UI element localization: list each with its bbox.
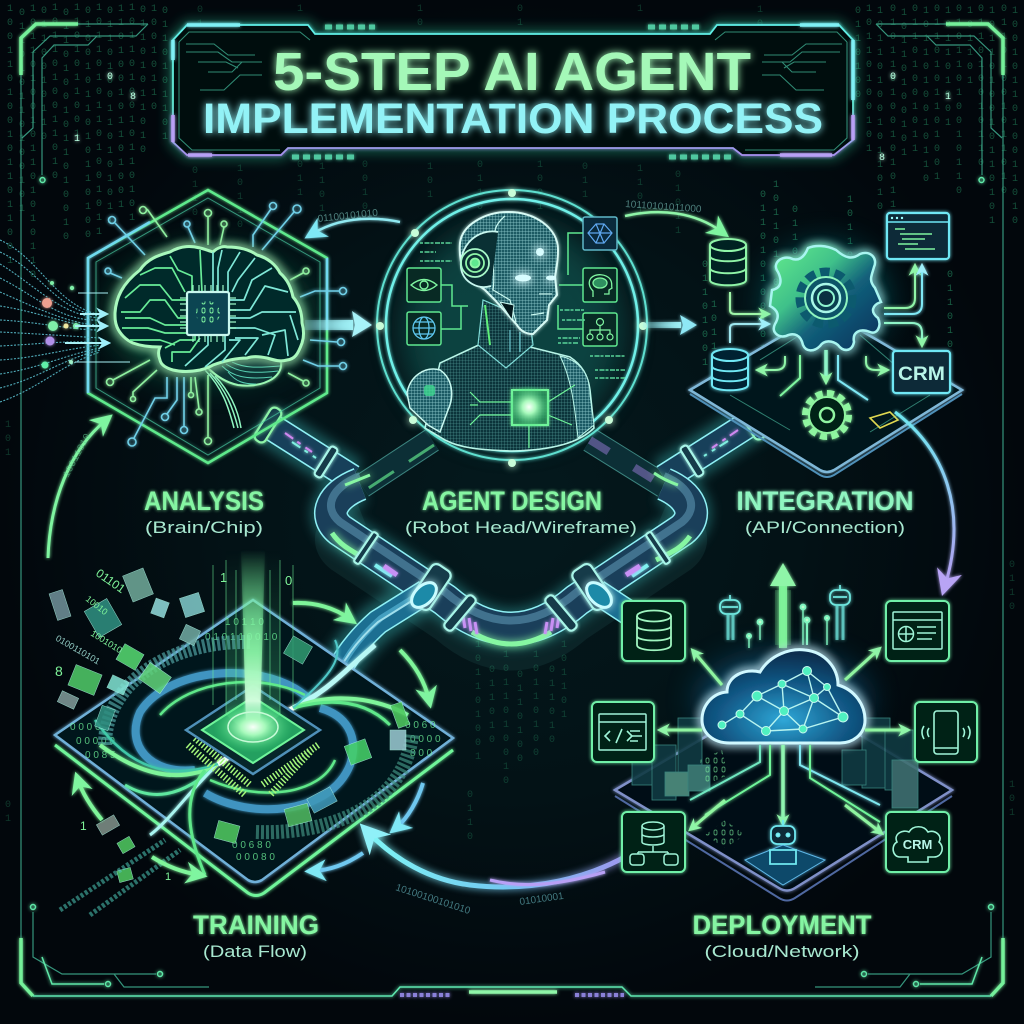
binary rain background: 10110100101 bbox=[864, 4, 874, 158]
platform bits: 0 0 0 8 0 bbox=[236, 852, 275, 863]
robot right shoulder bbox=[560, 356, 594, 438]
bright rain characters: 8 bbox=[876, 153, 888, 167]
icon: database lower bbox=[712, 349, 748, 390]
beam core bbox=[213, 701, 293, 753]
deployment arrows bbox=[662, 650, 906, 832]
binary rain background: 0110010110 bbox=[38, 6, 50, 146]
flying bits: 1 bbox=[165, 871, 171, 883]
panel: agent design bbox=[376, 189, 697, 467]
label: analysis: (Brain/Chip) bbox=[145, 518, 263, 537]
binary rain background: 01101001011010 bbox=[998, 4, 1010, 200]
brain folds bbox=[121, 250, 298, 367]
binary rain background: 101101001 bbox=[770, 180, 782, 306]
binary rain background: 1001101001011011001 bbox=[4, 4, 16, 270]
binary rain background: 01101001011010010 bbox=[60, 8, 72, 246]
bright rain characters: 1 bbox=[942, 92, 954, 106]
binary rain background: 01011 bbox=[672, 170, 684, 240]
flying bits: 1 bbox=[80, 819, 87, 833]
chip bbox=[186, 686, 320, 795]
binary rain background: 1001 bbox=[534, 160, 546, 216]
outer data bands bbox=[105, 642, 412, 832]
soft glows under steps bbox=[108, 220, 886, 790]
pipe reflection bbox=[331, 510, 691, 654]
binary rain background: 10110101101001011 bbox=[94, 3, 104, 241]
binary rain background: 0110 bbox=[790, 205, 800, 261]
icon: hierarchy bbox=[583, 313, 617, 346]
flying bits: 1 bbox=[220, 570, 227, 585]
binary rain background: 1101011001 bbox=[72, 3, 82, 143]
wireframe robot bbox=[407, 212, 594, 451]
brain bbox=[115, 247, 304, 428]
flying bits: 0100110101 bbox=[54, 633, 102, 666]
vertical data pins bbox=[747, 605, 829, 648]
binary arc labels: 10110101011000 bbox=[625, 199, 702, 215]
binary rain background: 0110101101001 bbox=[932, 4, 942, 186]
icon: CRM box: CRM bbox=[898, 364, 945, 385]
binary rain background: 1011010010110101 bbox=[986, 6, 998, 230]
pipe nozzles bbox=[407, 578, 616, 612]
output arrow to agent design bbox=[305, 311, 372, 337]
bottom robot bbox=[745, 820, 825, 885]
binary rain background: 01101001011 bbox=[910, 4, 920, 158]
pipe flanges bbox=[253, 403, 767, 632]
banner halo bbox=[173, 25, 853, 155]
binary rain background: 01 bbox=[514, 4, 526, 32]
label: agent design: (Robot Head/Wireframe) bbox=[405, 518, 637, 537]
robot neck bbox=[478, 300, 533, 368]
pseudo text lines bbox=[420, 243, 625, 378]
binary rain background: 0110101001011 bbox=[758, 190, 768, 372]
panel: deployment bbox=[592, 563, 977, 900]
icon: CRM cloud tile bbox=[886, 812, 949, 872]
data patches on platform bbox=[700, 750, 745, 848]
binary rain background: 0110 bbox=[474, 160, 486, 216]
cloud bbox=[702, 650, 865, 743]
binary rain background: 1011010010110 bbox=[920, 6, 932, 188]
binary rain background: 1 bbox=[294, 4, 306, 18]
binary rain background: 01101001 bbox=[700, 260, 710, 372]
icon: mobile tile bbox=[915, 702, 977, 762]
binary rain background: 011010110100101 bbox=[16, 8, 28, 218]
label: training: TRAINING bbox=[193, 910, 319, 940]
cloud to platform traces bbox=[690, 745, 880, 822]
icon: globe bbox=[407, 312, 441, 345]
binary rain background: 01101011010 bbox=[138, 5, 148, 159]
robot eyes bbox=[515, 248, 556, 282]
binary rain background: 1011010011010 bbox=[50, 3, 60, 185]
city buildings bbox=[632, 718, 918, 808]
training pipe light bbox=[296, 592, 426, 708]
binary arc labels bbox=[317, 199, 702, 225]
binary rain background: 101101001 bbox=[472, 640, 484, 766]
design connector lines bbox=[441, 233, 583, 329]
incoming data dots bbox=[42, 281, 79, 368]
arc arrow: design to integration bbox=[625, 212, 722, 232]
icon: CRM cloud tile: CRM bbox=[903, 837, 932, 852]
binary rain background: 10 bbox=[414, 4, 426, 32]
bottom frame bar bbox=[33, 987, 991, 996]
small robots bbox=[720, 585, 850, 640]
up arrow bbox=[770, 563, 796, 648]
binary arc labels: 01100101010 bbox=[317, 208, 379, 225]
icon: eye bbox=[407, 268, 441, 302]
platform bits: 0 0 8 5 bbox=[85, 750, 116, 761]
ring nodes bbox=[376, 189, 647, 467]
label: training bbox=[193, 910, 319, 961]
binary rain background: 011 bbox=[580, 162, 590, 204]
binary rain background: 1011010010 bbox=[500, 650, 512, 790]
arc arrow: integration to deployment bbox=[895, 412, 954, 586]
binary rain background: 0101101001010110 bbox=[888, 4, 898, 228]
binary arc labels: 01010001 bbox=[519, 891, 565, 908]
robot ear bbox=[461, 231, 498, 287]
icon: head bbox=[583, 268, 617, 302]
binary rain background: 01 bbox=[2, 800, 14, 828]
arc arrow: design to analysis bbox=[312, 219, 400, 234]
bright rain characters: 1 bbox=[72, 134, 82, 148]
light beam bbox=[213, 550, 293, 738]
binary rain background: 1101 bbox=[634, 164, 646, 220]
flying bits: 10010 bbox=[84, 594, 110, 617]
platform bits: 0 1 0 1 1 0 0 1 0 bbox=[205, 632, 278, 643]
output arrow to integration bbox=[643, 315, 697, 335]
binary rain background: 01 bbox=[194, 5, 206, 33]
upper pipe data lights bbox=[285, 430, 738, 458]
binary arc labels: 10100100101010 bbox=[394, 882, 472, 917]
binary rain background: 10010110 bbox=[148, 4, 160, 116]
icon: data tree tile bbox=[622, 812, 685, 872]
platform bits: 0 0 0 0 0 bbox=[76, 736, 115, 747]
binary rain background: 10110100 bbox=[530, 650, 542, 762]
icon: CRM box bbox=[893, 351, 950, 393]
panel: training bbox=[49, 550, 453, 915]
label: deployment: DEPLOYMENT bbox=[692, 910, 872, 940]
incoming data stream bbox=[0, 240, 100, 402]
binary rain background: 0110100 bbox=[852, 6, 864, 104]
binary rain background: 101101 bbox=[558, 640, 570, 724]
label: agent design: AGENT DESIGN bbox=[422, 486, 602, 516]
training platform bbox=[55, 600, 453, 882]
brain outline bbox=[115, 247, 304, 372]
binary rain background: 101101001011010 bbox=[874, 6, 886, 216]
binary rain background: 011 bbox=[294, 160, 306, 202]
binary rain background: 101 bbox=[1006, 780, 1018, 822]
flying bits: 01101 bbox=[93, 566, 128, 596]
frame terminal circles bbox=[30, 178, 994, 986]
robot neck wires bbox=[485, 305, 520, 352]
circuit traces around brain bbox=[105, 202, 346, 446]
platform bits: 0 0 6 0 bbox=[405, 720, 436, 731]
binary rain background: 0110100 bbox=[514, 670, 526, 768]
platform bits: 0 0 0 0 bbox=[70, 722, 101, 733]
robot torso bbox=[425, 343, 594, 451]
puzzle gear bbox=[770, 246, 881, 350]
title banner bbox=[173, 25, 853, 157]
robot left shoulder bbox=[407, 369, 452, 432]
purple strand bbox=[490, 872, 605, 885]
label: analysis bbox=[144, 486, 264, 537]
pipe purple light strips bbox=[384, 566, 640, 634]
cloud nodes bbox=[718, 666, 848, 736]
flying bits: 0 bbox=[285, 573, 292, 588]
binary rain background: 101 bbox=[2, 420, 14, 462]
pipe shells bbox=[262, 417, 760, 478]
robot head bbox=[460, 212, 558, 334]
binary rain background: 011010010110 bbox=[976, 4, 986, 172]
binary rain background: 011010 bbox=[546, 665, 558, 749]
panel: integration bbox=[690, 213, 962, 477]
platform bits: 8 0 0 bbox=[410, 748, 433, 759]
binary rain background: 101101 bbox=[964, 6, 976, 90]
lower left data ribbon bbox=[60, 840, 180, 915]
label: integration bbox=[736, 486, 914, 537]
incoming arrows bbox=[65, 293, 130, 362]
arc arrow: training to analysis bbox=[48, 420, 106, 558]
analysis hexagon bbox=[88, 190, 327, 463]
pipe cyan light strips bbox=[375, 565, 648, 576]
brain chip bbox=[180, 285, 236, 342]
binary rain background: 0110 bbox=[190, 166, 200, 222]
title line 1: 5-STEP AI AGENT bbox=[273, 42, 751, 102]
icon: neural net bbox=[583, 217, 617, 250]
yellow connector bbox=[870, 412, 898, 428]
label: integration: INTEGRATION bbox=[736, 486, 914, 516]
label: training: (Data Flow) bbox=[203, 942, 307, 961]
icon: database tile bbox=[622, 601, 685, 661]
vortex blue arcs bbox=[136, 673, 353, 809]
banner frame bbox=[173, 25, 853, 155]
icon: web tile bbox=[886, 601, 949, 661]
platform thickness bbox=[690, 394, 962, 477]
binary rain background: 110100101101001 bbox=[116, 4, 126, 214]
flying bits bbox=[54, 566, 292, 883]
binary arc label: 10011010 bbox=[62, 432, 94, 480]
label: analysis: ANALYSIS bbox=[144, 486, 264, 516]
binary rain background: 10 bbox=[754, 5, 766, 33]
pipe glow bbox=[262, 417, 760, 708]
label: agent design bbox=[405, 486, 637, 537]
integration platform bbox=[690, 310, 962, 472]
label: deployment: (Cloud/Network) bbox=[704, 942, 860, 961]
robot shoulder joint bbox=[424, 385, 435, 396]
connecting pipes bbox=[262, 417, 760, 708]
icon: database top bbox=[710, 239, 746, 285]
arc arrow: deployment to training bbox=[368, 832, 640, 917]
platform thickness bbox=[55, 745, 453, 896]
deployment platform bbox=[615, 690, 952, 890]
binary rain background: 10110100101101010110 bbox=[28, 4, 38, 284]
data fragments bbox=[49, 568, 410, 883]
binary arc labels bbox=[394, 882, 565, 917]
robot chest core bbox=[470, 385, 575, 448]
binary rain background: 101101 bbox=[844, 195, 856, 279]
binary rain background: 1011010010110101 bbox=[126, 3, 138, 227]
binary rain background: 1101 bbox=[316, 162, 328, 218]
flying bits: 8 bbox=[55, 663, 63, 679]
pipe green light strips bbox=[332, 473, 690, 644]
platform bits: 0 0 6 8 0 bbox=[232, 840, 271, 851]
binary rain background: 011010 bbox=[944, 270, 956, 354]
platform bits: 1 0 1 1 0 bbox=[225, 617, 264, 628]
binary rain background: 1 bbox=[634, 4, 646, 18]
icon: code window bbox=[887, 213, 949, 259]
platform bits: 0 0 0 0 bbox=[410, 734, 441, 745]
binary rain background: 0110 bbox=[1006, 560, 1018, 616]
binary rain background: 01001011010110100 bbox=[82, 6, 94, 244]
label: integration: (API/Connection) bbox=[745, 518, 905, 537]
bright rain characters bbox=[72, 72, 954, 167]
binary rain background: 0110 bbox=[464, 790, 476, 846]
title line 2: IMPLEMENTATION PROCESS bbox=[203, 95, 823, 143]
brain stem bbox=[205, 370, 241, 428]
face seam lines bbox=[493, 216, 552, 322]
binary rain background: 101101 bbox=[708, 300, 720, 384]
panel: analysis bbox=[0, 190, 372, 463]
flying bits: 1001010 bbox=[89, 628, 124, 655]
platform circuit bbox=[730, 335, 930, 432]
binary rain background: 1011010010 bbox=[862, 260, 874, 400]
lower gear bbox=[805, 393, 849, 437]
binary rain background: 0110101101 bbox=[160, 6, 170, 146]
cloud network bbox=[722, 671, 843, 731]
cycle arrows bbox=[78, 603, 429, 875]
binary rain background: 01011010010110 bbox=[954, 4, 964, 200]
cerebellum striations bbox=[222, 362, 280, 384]
flow arrows between top steps bbox=[312, 212, 722, 234]
binary rain background: 0010 bbox=[360, 160, 370, 216]
rear robot pipes bbox=[362, 440, 664, 491]
binary rain background: 101 bbox=[424, 162, 436, 204]
banner inner frame and circuit traces bbox=[179, 32, 847, 150]
binary rain background: 0110100110101011 bbox=[104, 6, 116, 230]
bright rain characters: 0 bbox=[104, 72, 116, 86]
bright rain characters: 0 bbox=[888, 72, 898, 86]
inner gear bbox=[801, 273, 851, 323]
integration arrows bbox=[730, 268, 922, 400]
binary rain background: 10110100101 bbox=[898, 8, 910, 162]
cerebellum bbox=[207, 357, 281, 386]
binary rain background: 101101001 bbox=[942, 6, 954, 132]
pipe top sheen bbox=[331, 476, 691, 620]
banner accents bbox=[173, 25, 853, 157]
icon: code tile bbox=[592, 702, 654, 762]
label: deployment bbox=[692, 910, 872, 961]
design ring bbox=[377, 190, 647, 460]
vortex streams bbox=[95, 640, 408, 875]
binary rain background: 10110 bbox=[234, 164, 246, 234]
platform bits bbox=[70, 617, 441, 863]
binary rain background: 011010 bbox=[486, 665, 498, 749]
bright rain characters: 8 bbox=[128, 92, 138, 106]
binary rain background: 1001011010011010 bbox=[1010, 6, 1020, 230]
